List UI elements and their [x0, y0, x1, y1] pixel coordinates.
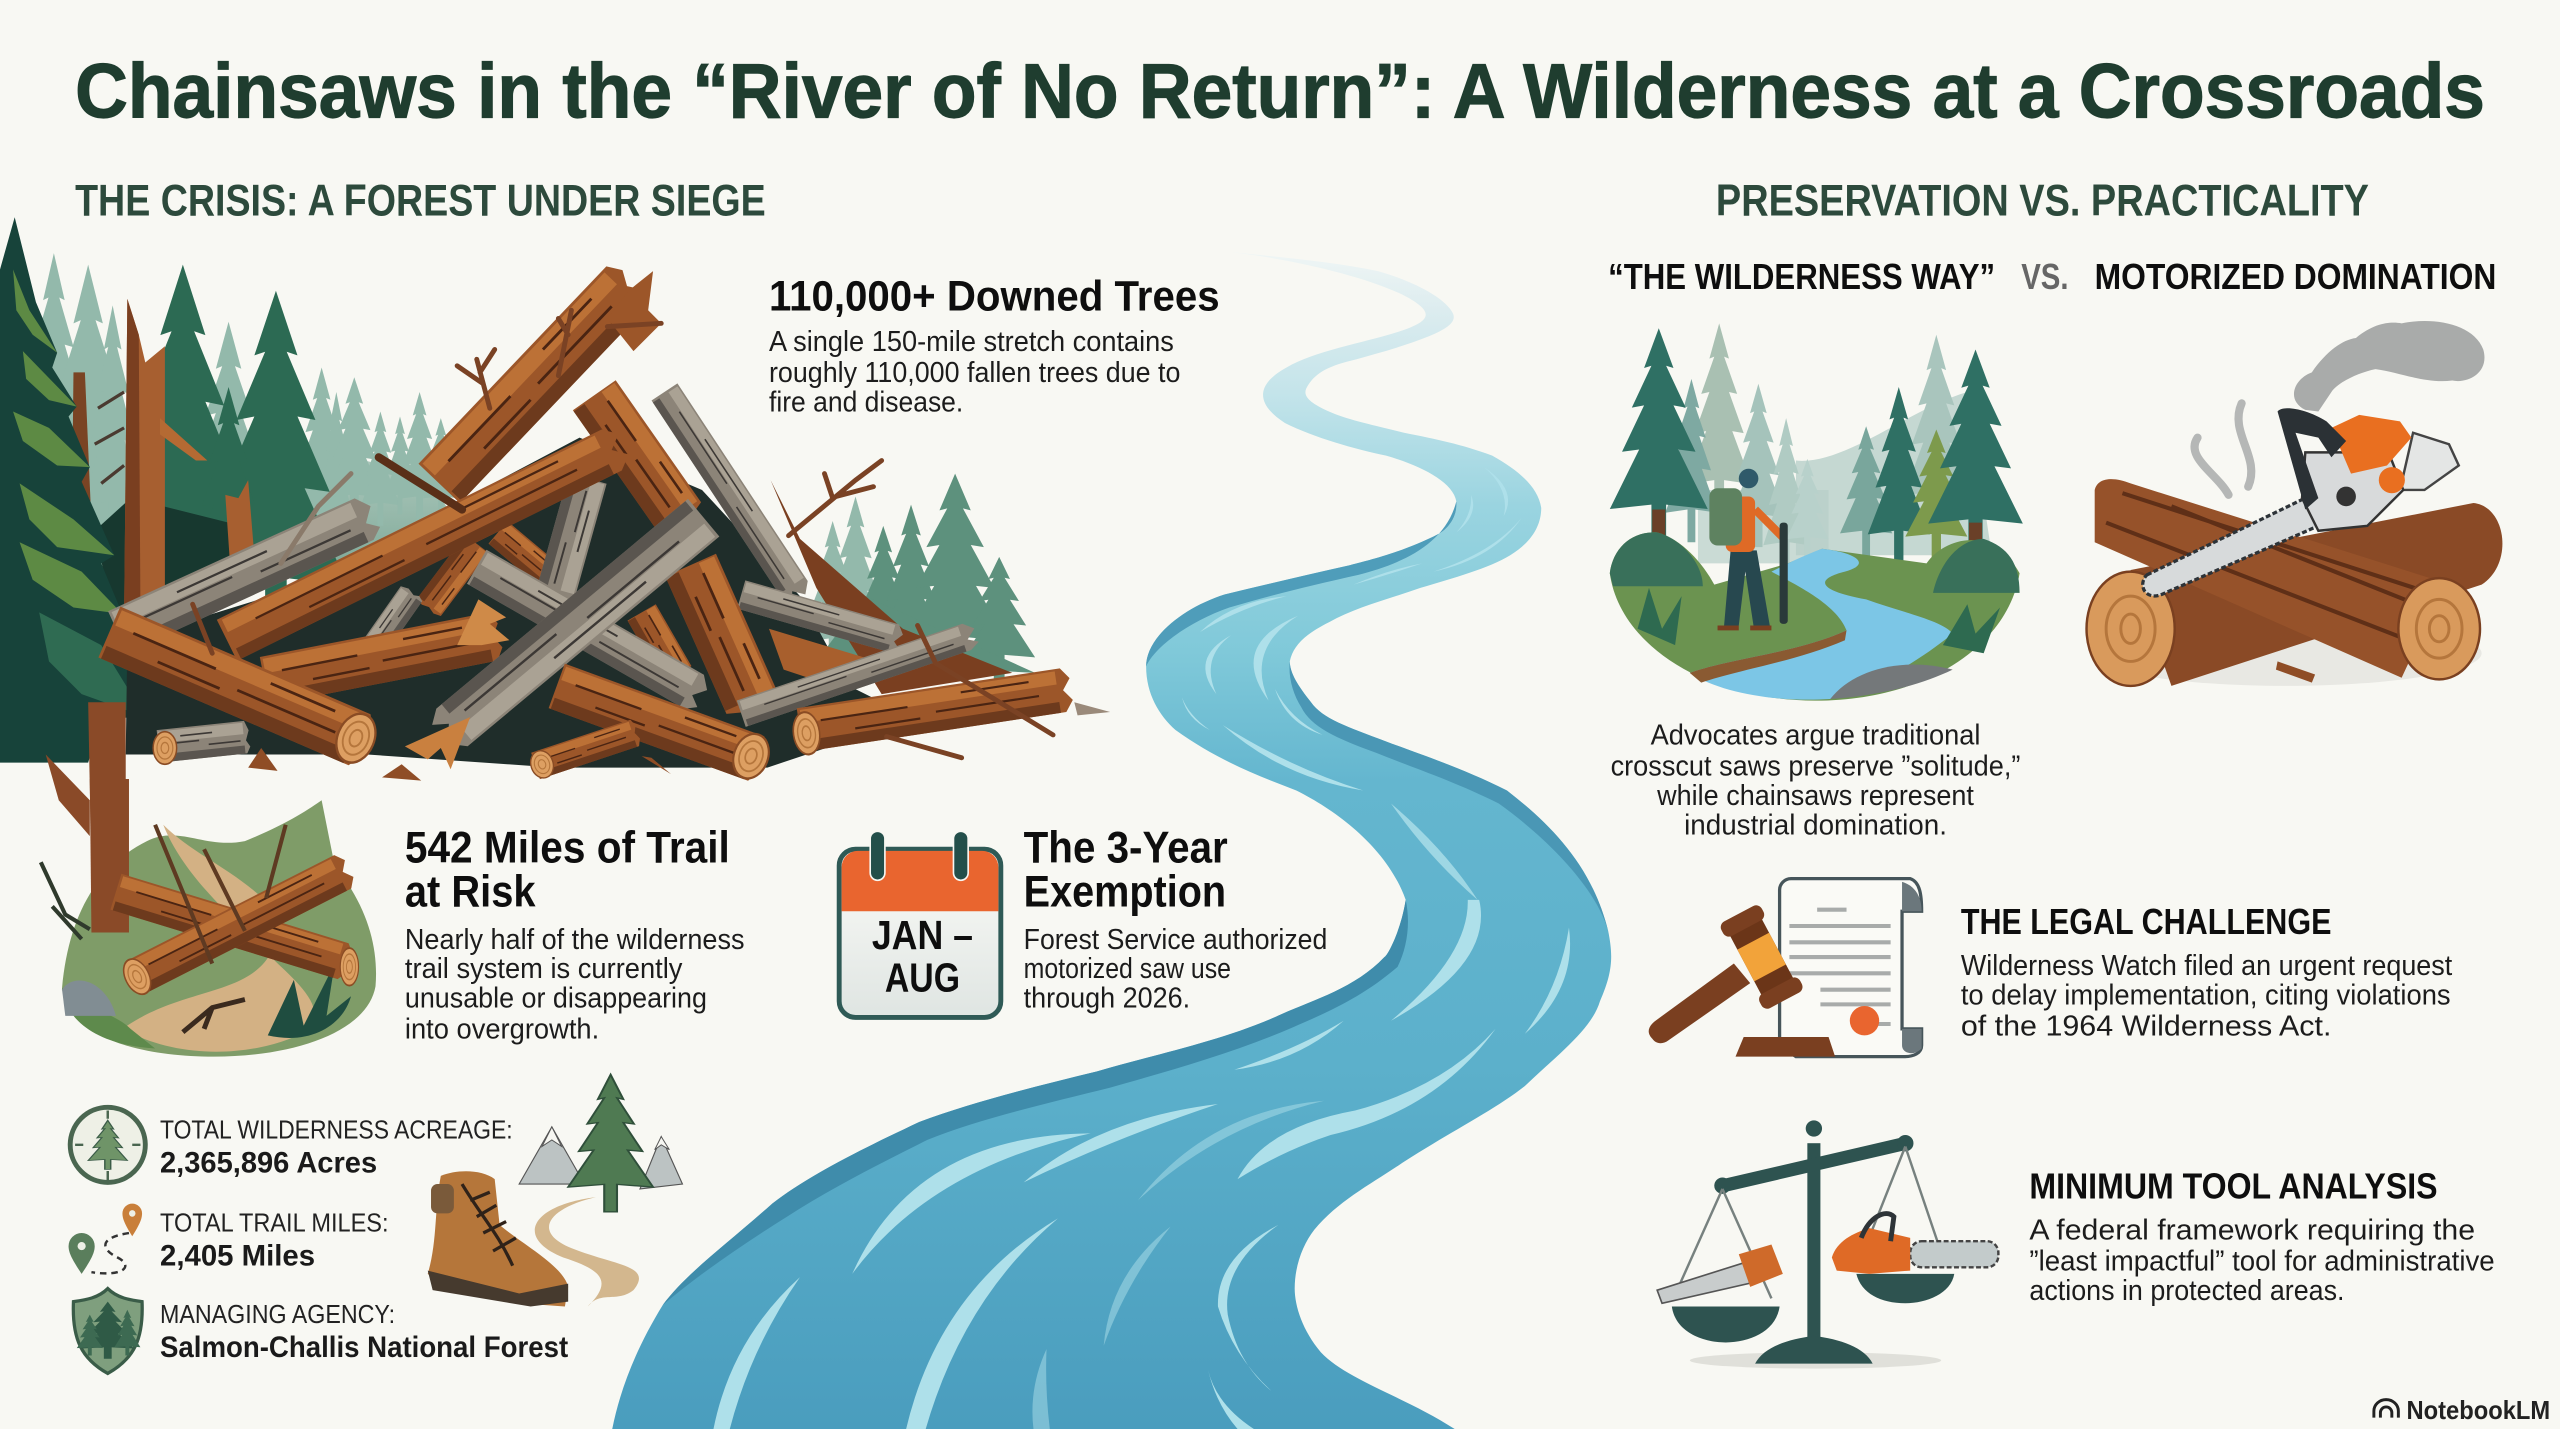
text: legal challenge: of the 1964 Wilderness Act.: [1961, 1010, 2331, 1042]
text: downed trees: [769, 272, 1220, 419]
branches and debris: [193, 310, 1053, 758]
stat: trail miles: 2,405 Miles: [160, 1240, 315, 1273]
text: exemption: through 2026.: [1024, 983, 1190, 1015]
text: legal challenge: Wilderness Watch filed an urgent request: [1961, 950, 2452, 982]
stat: acreage: 2,365,896 Acres: [160, 1147, 377, 1180]
icon: chainsaw on logs: [2087, 321, 2502, 686]
icon: calendar: AUG: [885, 954, 960, 1000]
text: minimum tool analysis: ”least impactful” tool for administrative: [2029, 1246, 2495, 1278]
stat: agency: MANAGING AGENCY:: [160, 1299, 395, 1329]
river: [612, 252, 1611, 1429]
river highlights: [713, 467, 1570, 1429]
icon: compass tree: [70, 1107, 145, 1182]
text: exemption: [1024, 823, 1327, 1015]
text: trail at risk: at Risk: [405, 867, 536, 916]
stat: trail miles: TOTAL TRAIL MILES:: [160, 1207, 389, 1237]
subheading: comparison: “THE WILDERNESS WAY”: [1608, 256, 1995, 297]
heading: preservation: PRESERVATION VS. PRACTICALITY: [1716, 177, 2369, 226]
text: legal challenge: to delay implementation, citing violations: [1961, 979, 2451, 1011]
text: trail at risk: trail system is currently: [405, 953, 683, 985]
brown mound behind pile: [771, 480, 1012, 694]
text: exemption: Exemption: [1024, 867, 1226, 916]
text: exemption: Forest Service authorized: [1024, 924, 1327, 956]
fallen logs: [98, 260, 1074, 783]
text: trail at risk: [405, 823, 744, 1046]
text: exemption: The 3-Year: [1024, 823, 1228, 872]
text: trail at risk: unusable or disappearing: [405, 983, 707, 1015]
subheading: comparison: [1608, 256, 2496, 297]
icon: calendar: JAN –: [872, 912, 973, 958]
icon: gavel and scroll: [1649, 879, 1922, 1057]
text: downed trees: A single 150-mile stretch contains: [769, 326, 1174, 358]
subheading: comparison: VS.: [2021, 256, 2069, 297]
icon: agency shield: [73, 1289, 142, 1373]
text: wilderness way caption: [1611, 720, 2020, 842]
icon: boot, mountains and trail: [428, 1075, 682, 1307]
logo: NotebookLM: NotebookLM: [2407, 1395, 2550, 1425]
stat: agency: [160, 1299, 568, 1364]
text: legal challenge: [1961, 901, 2452, 1042]
heading: crisis: THE CRISIS: A FOREST UNDER SIEGE: [75, 177, 766, 226]
text: minimum tool analysis: A federal framework requiring the: [2029, 1215, 2475, 1247]
title: Chainsaws in the “River of No Return”: A Wilderness at a Crossroads: [75, 50, 2485, 135]
text: wilderness way caption: Advocates argue traditional: [1651, 720, 1980, 752]
icon: trail pins: [69, 1204, 142, 1274]
text: minimum tool analysis: actions in protected areas.: [2029, 1275, 2344, 1307]
text: minimum tool analysis: [2029, 1166, 2495, 1307]
background forest: [18, 253, 1035, 679]
text: downed trees: 110,000+ Downed Trees: [769, 272, 1220, 319]
text: exemption: motorized saw use: [1024, 953, 1231, 985]
text: downed trees: fire and disease.: [769, 387, 963, 419]
stat: acreage: [160, 1114, 513, 1180]
text: minimum tool analysis: MINIMUM TOOL ANALYSIS: [2029, 1166, 2438, 1207]
panel: downed trees illustration: [0, 217, 1110, 874]
icon: blocked trail vignette: [41, 779, 376, 1057]
pile dark backing: [126, 438, 914, 768]
subheading: comparison: MOTORIZED DOMINATION: [2095, 256, 2496, 297]
big foreground fir: [0, 217, 145, 874]
text: trail at risk: Nearly half of the wilderness: [405, 924, 744, 956]
text: wilderness way caption: industrial domination.: [1684, 810, 1947, 842]
icon: balance scale: [1657, 1120, 1998, 1369]
stat: trail miles: [160, 1207, 389, 1273]
text: trail at risk: into overgrowth.: [405, 1014, 599, 1046]
text: trail at risk: 542 Miles of Trail: [405, 823, 730, 872]
icon: calendar: [839, 831, 1001, 1017]
text: wilderness way caption: crosscut saws preserve ”solitude,”: [1611, 751, 2020, 783]
standing snapped trunks: [95, 299, 255, 617]
stat: agency: Salmon-Challis National Forest: [160, 1331, 568, 1364]
stat: acreage: TOTAL WILDERNESS ACREAGE:: [160, 1114, 513, 1144]
icon: wilderness scene: [1610, 323, 2023, 701]
text: legal challenge: THE LEGAL CHALLENGE: [1961, 901, 2331, 942]
text: wilderness way caption: while chainsaws represent: [1656, 780, 1974, 812]
text: downed trees: roughly 110,000 fallen trees due to: [769, 357, 1180, 389]
